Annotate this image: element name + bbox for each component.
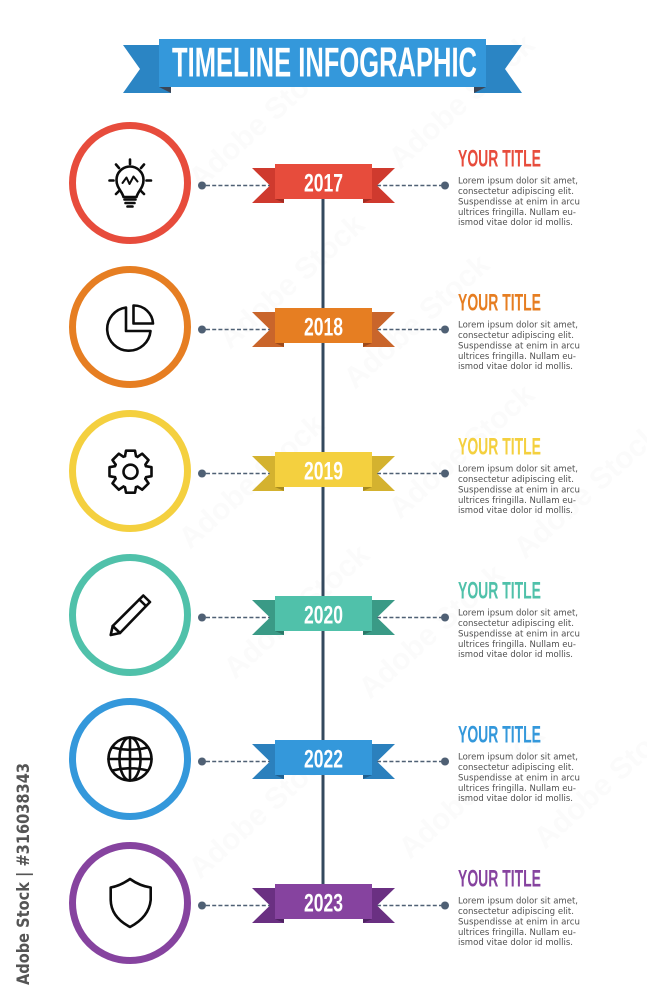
text block 2019: consectetur adipiscing elit. <box>458 475 574 485</box>
text block 2023: Suspendisse at enim in arcu <box>458 918 580 928</box>
text block 2019 <box>458 434 580 516</box>
ribbon 2018: 2018 <box>304 314 343 342</box>
connector left 2020 <box>198 614 271 622</box>
text block 2022: ismod vitae dolor id mollis. <box>458 794 573 804</box>
ribbon 2022: 2022 <box>304 746 343 774</box>
connector right 2023 <box>377 902 449 910</box>
connector right 2017 <box>377 182 449 190</box>
text block 2022: Suspendisse at enim in arcu <box>458 774 580 784</box>
circle: 2020 <box>72 558 188 672</box>
text block 2020: consectetur adipiscing elit. <box>458 619 574 629</box>
circle: 2019 <box>72 414 188 528</box>
connector right 2019 <box>377 470 449 478</box>
text block 2018: Suspendisse at enim in arcu <box>458 342 580 352</box>
row 2017 <box>72 126 580 240</box>
text block 2022: YOUR TITLE <box>458 722 541 748</box>
text block 2023 <box>458 866 580 948</box>
ribbon 2023: 2023 <box>304 890 343 918</box>
ribbon 2019: 2019 <box>304 458 343 486</box>
timeline vertical line <box>322 198 324 888</box>
text block 2017: Suspendisse at enim in arcu <box>458 198 580 208</box>
text block 2020: Lorem ipsum dolor sit amet, <box>458 608 578 618</box>
connector right 2022 <box>377 758 449 766</box>
text block 2022: ultrices fringilla. Nullam eu- <box>458 784 576 794</box>
text block 2023: ismod vitae dolor id mollis. <box>458 938 573 948</box>
icon: gear <box>110 451 152 493</box>
text: Adobe Stock <box>213 208 371 355</box>
text block 2019: Suspendisse at enim in arcu <box>458 486 580 496</box>
text block 2023: ultrices fringilla. Nullam eu- <box>458 928 576 938</box>
text: Adobe Stock <box>353 558 511 705</box>
text block 2018 <box>458 290 580 372</box>
connector left 2022 <box>198 758 271 766</box>
text block 2019: ultrices fringilla. Nullam eu- <box>458 496 576 506</box>
ribbon 2023 <box>252 884 395 923</box>
icon: pie chart <box>107 305 153 351</box>
connector right 2020 <box>377 614 449 622</box>
ribbon 2022 <box>252 740 395 779</box>
circle: 2023 <box>72 846 188 960</box>
circle: 2022 <box>72 702 188 816</box>
text block 2020: Suspendisse at enim in arcu <box>458 630 580 640</box>
text block 2017: Lorem ipsum dolor sit amet, <box>458 176 578 186</box>
connector left 2019 <box>198 470 271 478</box>
ribbon 2018 <box>252 308 395 347</box>
connector left 2018 <box>198 326 271 334</box>
text block 2022: consectetur adipiscing elit. <box>458 763 574 773</box>
text block 2018: YOUR TITLE <box>458 290 541 316</box>
text block 2018: Lorem ipsum dolor sit amet, <box>458 320 578 330</box>
icon: light bulb <box>110 160 151 206</box>
row 2023 <box>72 846 580 960</box>
connector left 2017 <box>198 182 271 190</box>
icon: pencil <box>111 596 150 635</box>
text: Adobe Stock <box>218 538 376 685</box>
text: Adobe Stock <box>383 28 541 175</box>
text block 2023: Lorem ipsum dolor sit amet, <box>458 896 578 906</box>
row 2020 <box>72 558 580 672</box>
text block 2017: ismod vitae dolor id mollis. <box>458 218 573 228</box>
text block 2017: consectetur adipiscing elit. <box>458 187 574 197</box>
ribbon 2017: 2017 <box>304 170 343 198</box>
row 2019 <box>72 414 580 528</box>
text block 2020: ultrices fringilla. Nullam eu- <box>458 640 576 650</box>
text block 2018: ultrices fringilla. Nullam eu- <box>458 352 576 362</box>
ribbon 2019 <box>252 452 395 491</box>
text: Adobe Stock <box>383 378 541 525</box>
text block 2018: consectetur adipiscing elit. <box>458 331 574 341</box>
text: Adobe Stock <box>393 718 551 865</box>
text block 2023: YOUR TITLE <box>458 866 541 892</box>
ribbon 2020: 2020 <box>304 602 343 630</box>
icon: shield <box>111 879 151 927</box>
text block 2020: YOUR TITLE <box>458 578 541 604</box>
connector right 2018 <box>377 326 449 334</box>
ribbon 2017 <box>252 164 395 203</box>
text block 2017 <box>458 146 580 228</box>
stock image credit: Adobe Stock | #316038343 <box>14 763 34 985</box>
icon: globe <box>108 738 152 780</box>
row 2022 <box>72 702 580 816</box>
text block 2020 <box>458 578 580 660</box>
circle: 2018 <box>72 270 188 384</box>
text block 2022: Lorem ipsum dolor sit amet, <box>458 752 578 762</box>
text: Adobe Stock <box>173 408 331 555</box>
row 2018 <box>72 270 580 384</box>
connector left 2023 <box>198 902 271 910</box>
circle: 2017 <box>72 126 188 240</box>
ribbon 2020 <box>252 596 395 635</box>
text block 2017: ultrices fringilla. Nullam eu- <box>458 208 576 218</box>
text block 2019: YOUR TITLE <box>458 434 541 460</box>
text block 2020: ismod vitae dolor id mollis. <box>458 650 573 660</box>
text block 2023: consectetur adipiscing elit. <box>458 907 574 917</box>
text: Adobe Stock <box>338 248 496 395</box>
text block 2019: ismod vitae dolor id mollis. <box>458 506 573 516</box>
text block 2018: ismod vitae dolor id mollis. <box>458 362 573 372</box>
text: Adobe Stock <box>183 48 341 195</box>
text block 2022 <box>458 722 580 804</box>
text block 2019: Lorem ipsum dolor sit amet, <box>458 464 578 474</box>
text: Adobe Stock <box>183 738 341 885</box>
text block 2017: YOUR TITLE <box>458 146 541 172</box>
title banner <box>123 38 522 93</box>
